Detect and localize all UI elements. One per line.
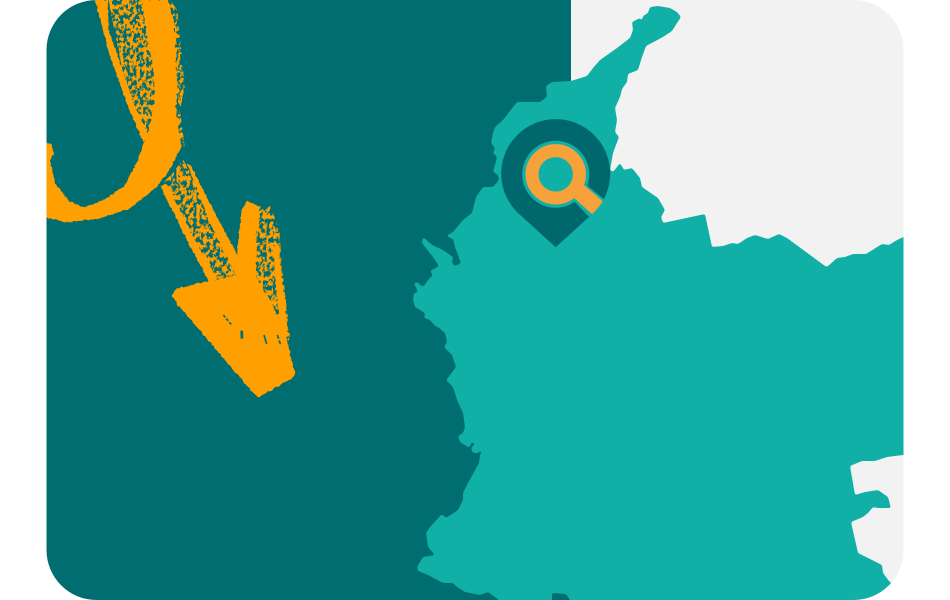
background: ocean dark teal xyxy=(40,0,571,600)
brush texture speckled areas xyxy=(108,0,290,350)
brush specks on arrow head xyxy=(223,315,281,345)
arrow loop solid band xyxy=(43,0,182,222)
map: country silhouette xyxy=(413,6,915,600)
icon: location pin with magnifying glass xyxy=(501,119,610,247)
magnifier handle xyxy=(574,185,603,214)
arrow head xyxy=(172,201,295,398)
magnifier halo xyxy=(522,141,610,220)
arrow right wing edge xyxy=(273,247,288,337)
arrow left edge streak xyxy=(95,0,148,142)
shaft right edge xyxy=(187,163,238,277)
shaft left edge xyxy=(161,184,217,283)
magnifier ring xyxy=(532,151,579,198)
pin body xyxy=(501,119,610,247)
background: land area light grey xyxy=(570,0,910,600)
arrow: orange brush stroke xyxy=(43,0,295,398)
